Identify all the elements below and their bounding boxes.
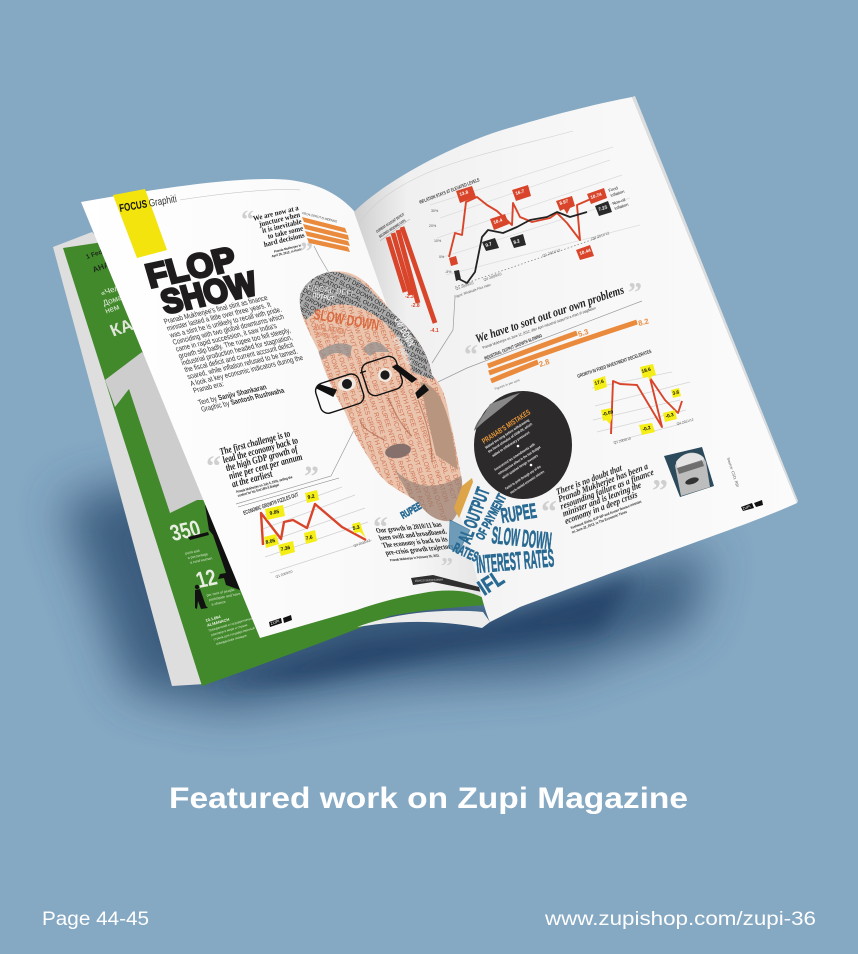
quote: Yashwant Sinha: resounding failure as a finance — [559, 466, 655, 512]
head filled with words: RUPEE GROWTH OUTPUT INTEREST RATES INFLATION SLOW DOWN DEFICIT — [271, 307, 353, 542]
callout: Pranab's mistakes: Waited too long before withdrawing — [484, 418, 530, 450]
quote marks: ” — [652, 472, 668, 508]
page number: ZUPI — [270, 618, 280, 626]
area chart: current account deficit: CURRENT ACCOUNT DEFICIT — [375, 212, 406, 234]
quote: Yashwant Sinha: minister and is leaving the — [561, 479, 643, 519]
line chart: inflation — [419, 147, 640, 299]
stat 12: participate and have — [208, 592, 241, 602]
suit words in blue: RUPEE — [399, 501, 424, 522]
line chart: fixed investment: -0.2 — [642, 425, 652, 433]
intro text: Pranab era: — [192, 381, 225, 395]
line chart: inflation: Q1 2009/10 — [455, 281, 474, 291]
head filled with words: CURRENT ACCOUNT INFLATION FISCAL DEFICIT RUPEE SLOW DOWN OUTPUT — [278, 305, 361, 543]
hair words: CIT INFLA — [391, 335, 414, 367]
area chart: current account deficit: BECOMES WIDENING GAPS — [378, 218, 407, 239]
page number — [269, 615, 292, 627]
quote: Yashwant Sinha: Yashwant Sinha, BJP MP and former finance minister, — [570, 499, 643, 530]
top quote: juncture when — [257, 211, 301, 229]
suit words in blue: OF PAYMENT — [472, 491, 509, 542]
hair texture: OUTPUT DEFICIT GROWTH SLOW DOWN FISCAL INFLATION RUPEE OUTPUT DEFICIT — [290, 268, 511, 390]
quote heading: We have to sort out our own problems — [473, 283, 626, 346]
area chart: current account deficit: -4.1 — [430, 328, 439, 334]
line chart: fixed investment — [577, 349, 694, 445]
intro text: Graphic by Santosh Rushwaha — [200, 387, 286, 414]
head filled with words: SLOW DOWN INFLATION RUPEE OUTPUT DEFICIT INTEREST RATES GROWTH — [301, 297, 383, 532]
head filled with words: OUTPUT SLOW DOWN RUPEE INFLATION CURRENT ACCOUNT DEFICIT GROWTH — [400, 265, 485, 510]
line chart: economic growth: 9.85 — [269, 509, 280, 517]
hair texture: RUPEE INFLATION FISCAL OUTPUT DEFICIT SLOW DOWN GROWTH RUPEE FISCAL — [293, 263, 509, 382]
hair texture: FISCAL DEFICIT OUTPUT SLOW DOWN DEFICIT INFLATION RUPEE GROWTH OUTPUT — [307, 237, 528, 358]
quote heading — [464, 278, 642, 371]
back page heading text: АНАТОЛИЙ — [91, 251, 137, 274]
top quote: Pranab Mukherjee in — [274, 243, 302, 254]
top quote: hard decisions — [263, 231, 306, 249]
line chart: inflation: Figure: Wholesale Price Index — [454, 283, 491, 299]
suit words in blue: RATES — [451, 539, 481, 565]
intro text: Pranab Mukherjee's final stint as finance — [163, 295, 269, 326]
stat 350 — [167, 514, 213, 567]
eyes — [336, 366, 394, 393]
area chart: current account deficit: -2.3 — [405, 294, 414, 300]
area chart: current account deficit: -2.8 — [411, 303, 420, 309]
stat 350: a percentage — [187, 552, 209, 560]
back page quote: Дома — [101, 293, 124, 308]
line chart: inflation: 10.74 — [590, 192, 603, 200]
contact shadow under spine — [215, 575, 640, 685]
head filled with words: INTEREST RATES OUTPUT RUPEE INFLATION SLOW DOWN FISCAL DEFICIT — [377, 273, 457, 501]
head filled with words: GROWTH SLOW DOWN FISCAL DEFICIT RUPEE INTEREST RATES INFLATION — [339, 285, 420, 516]
quote marks: ” — [441, 554, 453, 580]
hair texture: FISCAL DEFICIT SLOW DOWN OUTPUT RUPEE INFLATION GROWTH DEFICIT OUTPUT — [296, 258, 517, 379]
hair texture: OUTPUT RUPEE DEFICIT FISCAL SLOW DOWN GROWTH INFLATION FISCAL DEFICIT — [304, 242, 522, 361]
quote marks: ” — [304, 460, 319, 493]
line chart: inflation: 9.7 — [485, 241, 493, 248]
line chart: inflation: Q4 2009/10 — [483, 272, 502, 282]
back page footer text: страна для государственный — [213, 626, 255, 641]
callout: Pranab's mistakes — [474, 391, 572, 499]
hexagon connector lines — [236, 246, 357, 504]
bar chart: industrial output — [484, 317, 650, 391]
intro text: growth slip badly. The rupee too fell steeply, — [177, 327, 292, 361]
line chart: economic growth — [238, 478, 372, 579]
section label: FOCUS — [118, 198, 148, 215]
title: Featured work on Zupi Magazine — [169, 782, 688, 815]
quote: first challenge: nine per cent per annum — [227, 451, 304, 481]
line chart: fixed investment: 18.6 — [641, 367, 652, 375]
section label: Graphiti — [148, 193, 178, 210]
intro text: industrial production headed for stagnation, — [180, 334, 294, 367]
top margin line — [360, 131, 573, 222]
source note: Source: CSO, RBI — [726, 457, 739, 488]
credit strip: GRAPHIC BY SANTOSH RUSHWAHA — [415, 578, 443, 583]
hair words: INFLATION — [314, 322, 347, 337]
quote marks — [541, 472, 668, 529]
head filled with words: INFLATION RUPEE SLOW DOWN GROWTH DEFICIT OUTPUT INTEREST RATES — [286, 302, 368, 538]
quote: first challenge: context for his first UPA II Budget — [237, 482, 280, 498]
section label — [118, 193, 178, 215]
top quote — [252, 204, 308, 261]
quote: growth in 2010/11: Our growth in 2010/11 has — [375, 521, 443, 535]
head filled with words: CURRENT ACCOUNT RUPEE INTEREST RATES INFLATION FISCAL DEFICIT — [392, 268, 471, 491]
line chart: inflation: 20% — [429, 224, 437, 228]
quote heading: ” — [628, 278, 642, 309]
credit strip — [411, 575, 483, 592]
glasses — [313, 354, 428, 415]
page number — [741, 500, 763, 511]
nose and face lines — [360, 398, 432, 462]
back page footer text — [205, 605, 260, 647]
head filled with words: INTEREST RATES GROWTH RUPEE FISCAL DEFICIT OUTPUT INFLATION — [309, 295, 385, 512]
line chart: economic growth: Q4 2011/12 — [353, 538, 371, 548]
hair texture: FISCAL RUPEE SLOW DOWN DEFICIT OUTPUT GROWTH INFLATION FISCAL DEFICIT — [287, 274, 505, 393]
hair texture: SLOW DOWN FISCAL DEFICIT RUPEE OUTPUT INFLATION DEFICIT OUTPUT GROWTH — [301, 247, 522, 368]
head filled with words: INFLATION OUTPUT CURRENT ACCOUNT RUPEE SLOW DOWN FISCAL DEFICIT — [332, 287, 415, 525]
area chart: current account deficit — [375, 212, 439, 334]
ear — [420, 382, 458, 470]
suit words in blue: RUPEE — [499, 500, 538, 528]
line chart: economic growth: 5.3 — [352, 525, 360, 532]
line chart: inflation: Food — [608, 185, 619, 193]
back page quote — [94, 280, 146, 340]
hair texture: RUPEE DEFICIT FISCAL SLOW DOWN OUTPUT INFLATION GROWTH RUPEE — [273, 300, 469, 408]
beard shading — [395, 470, 462, 525]
hair words: AGRICULTURE — [316, 331, 341, 341]
headline: SHOW — [157, 265, 262, 322]
callout: Pranab's mistakes: PRANAB'S MISTAKES — [480, 408, 532, 446]
intro text: soared, while inflation refused to be tamed. — [186, 348, 299, 381]
quote: first challenge: Pranab Mukherjee on July 6, 2009, setting the — [236, 475, 293, 494]
quote: Yashwant Sinha: on June 22, 2012, in The Economic Times — [571, 510, 628, 535]
head filled with words: OUTPUT INFLATION RUPEE SLOW DOWN DEFICIT GROWTH CURRENT ACCOUNT — [347, 282, 432, 527]
head filled with words: RUPEE FISCAL DEFICIT INFLATION INTEREST RATES OUTPUT SLOW DOWN — [354, 280, 434, 508]
quote: first challenge: the high GDP growth of — [224, 443, 300, 473]
page number: ZUPI — [742, 505, 751, 511]
line chart: inflation: 10.44 — [579, 248, 592, 256]
line chart: fixed investment: 3.6 — [672, 389, 680, 397]
magazine spread: INTEREST RATES — [475, 544, 555, 579]
headline — [142, 240, 262, 322]
head filled with words: SLOW DOWN RUPEE FISCAL DEFICIT OUTPUT INTEREST RATES INFLATION — [370, 275, 450, 503]
quote: growth in 2010/11: The economy is back to its — [381, 536, 449, 550]
tie — [454, 478, 473, 518]
bar chart: industrial output: 8.2 — [637, 317, 650, 328]
chart title: ECONOMIC GROWTH FIZZLES OUT — [243, 492, 300, 517]
line chart: inflation: 30% — [431, 209, 439, 213]
hair texture: INFLATION OUTPUT DEFICIT GROWTH FISCAL RUPEE SLOW DOWN FISCAL DEFICIT — [299, 252, 516, 372]
footer: website: www.zupishop.com/zupi-36 — [544, 909, 816, 930]
stat 12: a chance — [211, 600, 226, 607]
line chart: inflation: Non-oil — [612, 197, 626, 206]
suit words in blue — [399, 485, 555, 600]
intro text: came in rapid succession, it saw India's — [175, 323, 279, 354]
line chart: inflation: 10.4 — [493, 217, 503, 225]
quote: Yashwant Sinha — [554, 451, 662, 536]
head filled with words: OUTPUT FISCAL DEFICIT INFLATION SLOW DOWN RUPEE CURRENT ACCOUNT — [293, 300, 377, 538]
top quote: to take some — [267, 224, 304, 241]
line chart: inflation: 0% — [439, 255, 445, 259]
magazine spread: SLOW DOWN — [490, 522, 553, 555]
book drop shadow — [62, 470, 710, 708]
back page footer text: ALMANACH — [206, 617, 230, 628]
hair words: FISCAL DEFI — [307, 282, 354, 298]
temple hair — [318, 343, 352, 360]
top quote: April 28, 2012, in Kochi — [271, 247, 303, 258]
suit words in blue: IFL — [473, 565, 509, 600]
stat 12 — [193, 560, 242, 608]
back page quote: «Чел — [99, 283, 121, 298]
intro text: A look at key economic indicators during the — [189, 354, 305, 388]
line chart: inflation: Q1 2011/12 — [542, 248, 561, 258]
quote: first challenge: The first challenge is to — [218, 427, 292, 457]
line chart: economic growth: 9.2 — [307, 494, 315, 501]
line chart: inflation: 8.97 — [559, 198, 569, 206]
hair texture: SLOW DOWN OUTPUT FISCAL DEFICIT INFLATION RUPEE GROWTH SLOW DOWN — [284, 279, 495, 395]
photo — [664, 447, 714, 497]
yellow tag — [113, 189, 167, 258]
line chart: fixed investment: GROWTH IN FIXED INVESTMENT DECELERATES — [577, 349, 653, 380]
top quote: We are now at a — [252, 204, 300, 223]
back page footer text: гражданская позиция — [215, 633, 247, 646]
back page footer text: Гражданский и государственный — [208, 616, 256, 632]
bar chart: industrial output: INDUSTRIAL OUTPUT GROWTH SLOWING — [484, 333, 543, 362]
line chart: fixed investment: Q1 2009/10 — [613, 436, 631, 445]
intro text: minister lasted a little over three years. It — [166, 301, 272, 333]
head filled with words: FISCAL DEFICIT RUPEE INTEREST RATES GROWTH INFLATION SLOW DOWN — [324, 290, 405, 521]
quote marks: “ — [373, 511, 388, 544]
callout: Pranab's mistakes: retrospective effect in the last Budget — [497, 445, 542, 476]
mouth — [384, 442, 412, 460]
head filled with words: FISCAL DEFICIT GROWTH SLOW DOWN OUTPUT INFLATION RUPEE DEFICIT — [385, 270, 465, 500]
line chart: inflation: -5% — [445, 270, 452, 274]
bar chart: top orange bars — [302, 211, 350, 252]
hair words: SLOW DOWN — [312, 306, 380, 334]
page stack under spine — [357, 611, 490, 628]
quote heading: Pranab Mukherjee on June 12, 2012, after April industrial output hit a chart of stagflation — [482, 306, 596, 350]
line chart: inflation: inflation — [614, 202, 630, 211]
quote: growth in 2010/11: Pranab Mukherjee in February 26, 2011 — [389, 553, 440, 562]
callout: Pranab's mistakes: Announced tax amendments with — [493, 442, 536, 472]
back pages paper stack — [53, 232, 340, 686]
stat 350: a rural woman — [190, 556, 213, 565]
right page — [354, 96, 798, 622]
stat 12: 12 — [193, 564, 220, 593]
bar chart: industrial output: Figures in per cent — [494, 378, 520, 391]
head filled with words: INFLATION RUPEE FISCAL DEFICIT OUTPUT INTEREST RATES SLOW DOWN — [408, 263, 488, 491]
quote mark pair top — [241, 205, 313, 266]
line chart: economic growth: 7.36 — [280, 545, 291, 553]
bar chart: industrial output: 5.3 — [577, 327, 590, 339]
suit words in blue: AL OUTPUT — [455, 485, 495, 547]
back page quote: нем — [104, 302, 121, 315]
quote: first challenge: lead the economy back to — [221, 434, 300, 465]
back page heading text — [85, 239, 137, 275]
line chart: inflation: 13.8 — [459, 189, 469, 197]
quote: Yashwant Sinha: economy in a deep crisis — [563, 488, 639, 526]
headline: FLOP — [142, 240, 240, 296]
head filled with words: INFLATION CURRENT ACCOUNT GROWTH RUPEE DEFICIT SLOW DOWN OUTPUT — [362, 278, 447, 522]
back page heading text: 1 Fedor — [85, 247, 110, 261]
hair words — [307, 282, 416, 367]
line chart: fixed investment: -0.09 — [602, 409, 614, 418]
line chart: economic growth: Q1 2009/10 — [275, 569, 293, 579]
hair texture — [300, 272, 434, 380]
intro text: Coinciding with two global downturns which — [172, 313, 286, 347]
quote mark pair top: “ — [241, 205, 254, 234]
quote marks: “ — [541, 493, 557, 529]
quote marks — [206, 450, 453, 580]
callout: Pranab's mistakes: much-needed economic reforms — [509, 470, 545, 495]
quote: first challenge — [218, 426, 312, 498]
bar chart: industrial output: 2.8 — [538, 357, 551, 369]
hair words: OW DOWN — [391, 315, 416, 349]
quote: growth in 2010/11 — [375, 521, 458, 563]
icon: standing figures — [188, 505, 240, 609]
stat 350: 350 — [167, 515, 204, 546]
back page: green — [63, 238, 487, 686]
quote: Yashwant Sinha: There is no doubt that — [554, 462, 624, 497]
line chart: inflation: inflation — [610, 189, 626, 198]
hair words: OUTPUT — [312, 292, 335, 303]
line chart: economic growth: 7.6 — [305, 535, 313, 542]
quote mark pair top: ” — [300, 237, 313, 266]
stat 350: point and — [185, 549, 200, 556]
portrait — [300, 271, 554, 596]
callout: Pranab's mistakes: which spooked foreign investors — [501, 454, 539, 480]
quote marks: “ — [206, 450, 221, 483]
line chart: economic growth: 8.05 — [265, 538, 276, 546]
hair texture: OUTPUT SLOW DOWN INFLATION DEFICIT RUPEE FISCAL GROWTH OUTPUT — [279, 289, 478, 399]
quote: Yashwant Sinha: Pranab Mukherjee has been a — [557, 460, 650, 504]
intro text: the fiscal deficit and current account deficit — [183, 342, 295, 374]
hair texture: FISCAL DEFICIT OUTPUT RUPEE GROWTH SLOW DOWN INFLATION DEFICIT — [276, 295, 474, 404]
head filled with words: RUPEE SLOW DOWN OUTPUT INFLATION FISCAL DEFICIT CURRENT ACCOUNT — [316, 292, 400, 530]
big grey numeral — [105, 352, 260, 513]
quote: growth in 2010/11: pre-crisis growth trajectory — [384, 543, 456, 557]
back page quote: КАК — [107, 312, 146, 340]
quote: first challenge: at the earliest — [230, 468, 274, 489]
top quote: it is inevitable — [261, 217, 302, 235]
footer: page reference: Page 44-45 — [42, 909, 149, 930]
callout: Pranab's mistakes: added to inflationary pressures — [491, 431, 530, 458]
stat 12: per cent of people — [206, 588, 235, 597]
quote: growth in 2010/11: been swift and broadbased. — [378, 528, 448, 542]
hair texture: DEFICIT GROWTH RUPEE FISCAL OUTPUT SLOW DOWN INFLATION DEFICIT FISCAL — [282, 284, 500, 404]
line chart: inflation: 7.25 — [598, 204, 608, 212]
magazine spread — [53, 96, 798, 686]
bar chart: top orange bars: FISCAL DEFICIT IS WIDENING — [302, 211, 338, 224]
line chart: inflation: 16.7 — [515, 188, 525, 196]
left page — [81, 179, 487, 638]
line chart: inflation: 8.2 — [513, 238, 521, 245]
back page footer text: 10.1.664 — [205, 614, 222, 623]
head filled with words — [300, 271, 462, 522]
line chart: fixed investment: -0.3 — [665, 412, 675, 420]
callout: Pranab's mistakes: the fiscal stimulus of 2008-09, which — [487, 422, 533, 454]
line chart: inflation: 10% — [434, 239, 442, 243]
line chart: fixed investment: Q4 2011/12 — [676, 418, 694, 426]
line chart: fixed investment: 17.6 — [594, 379, 605, 387]
intro text: Text by Sanjiv Shankaran — [197, 384, 268, 407]
chart title: INFLATION STAYS AT ELEVATED LEVELS — [419, 177, 481, 206]
connector lines — [432, 297, 642, 382]
intro text: was a stint he is unlikely to recall with pride. — [168, 306, 283, 340]
back page footer text: разговор в мире и стране — [211, 623, 248, 637]
callout: Pranab's mistakes: Failed to push through any of the — [504, 465, 542, 491]
quote heading: “ — [464, 340, 478, 371]
line chart: inflation: Q4 2011/12 — [591, 231, 610, 241]
intro text — [162, 292, 316, 414]
